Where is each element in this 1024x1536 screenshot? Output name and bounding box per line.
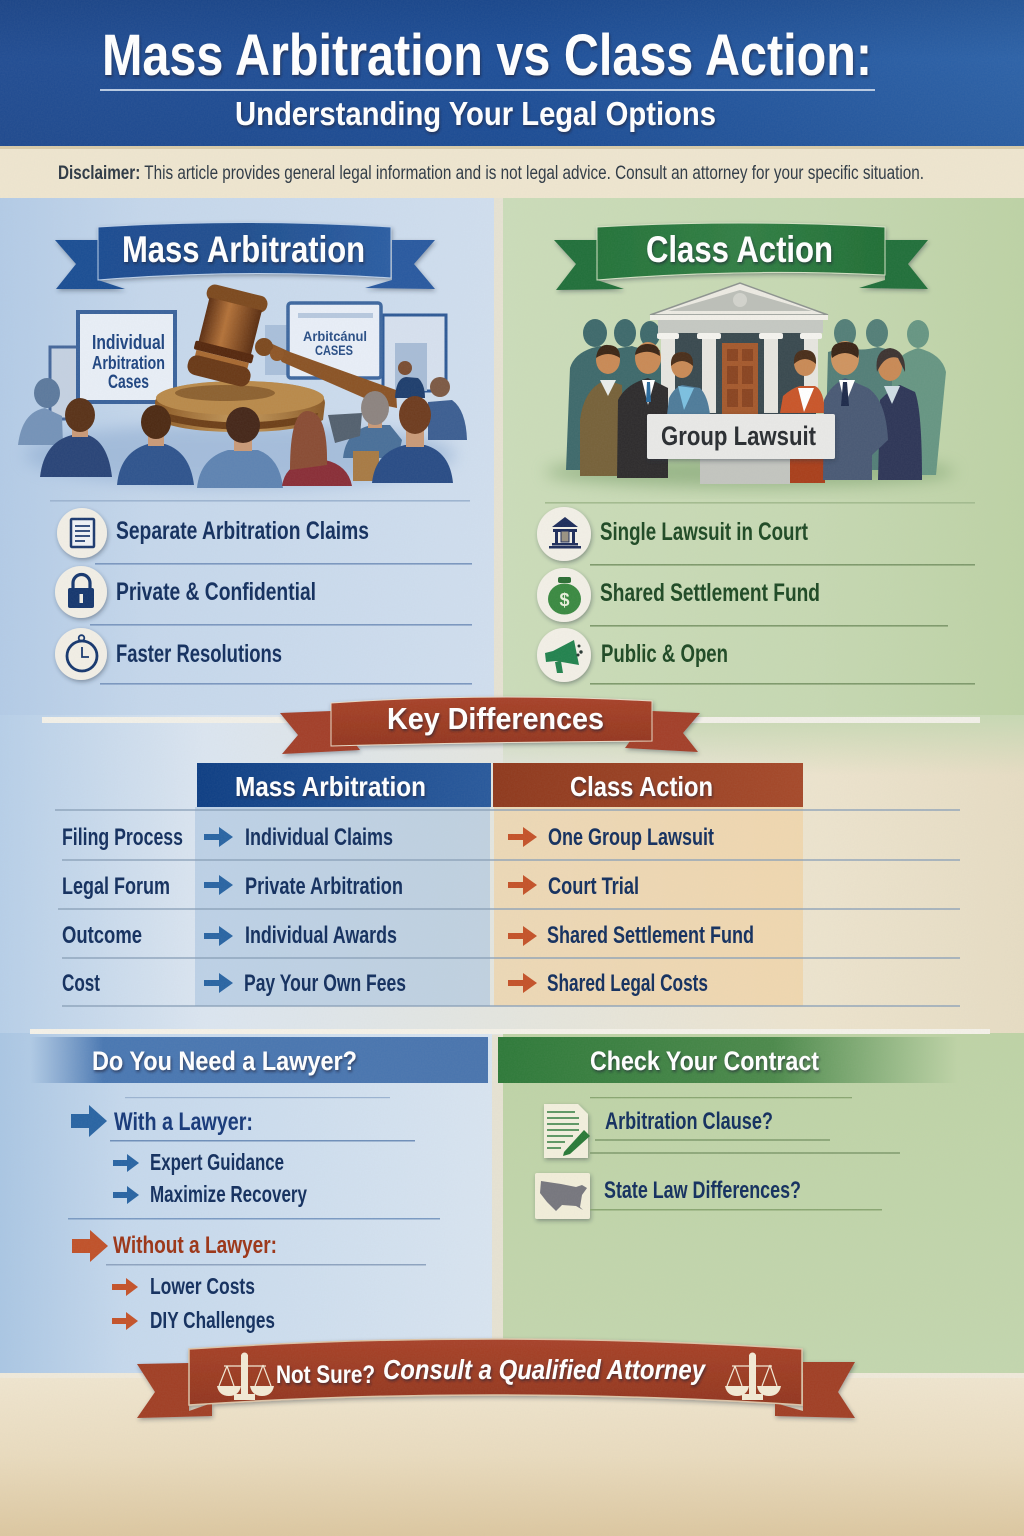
icon: document [57, 508, 107, 558]
heading: do you need a lawyer: Do You Need a Lawyer? [92, 1046, 357, 1076]
row: outcome [62, 922, 754, 949]
row: cost [62, 970, 708, 997]
comparison table [55, 763, 960, 1006]
feature row: single lawsuit: Single Lawsuit in Court [600, 518, 808, 546]
icon: scales left [217, 1353, 274, 1400]
item: state law differences: State Law Differences? [604, 1177, 801, 1204]
ribbon: key differences: Key Differences [387, 701, 604, 736]
courthouse [650, 283, 828, 484]
item: arbitration clause [544, 1104, 773, 1158]
banner text: Not Sure? [276, 1361, 375, 1389]
feature row: settlement [537, 568, 820, 622]
sign: group lawsuit: Group Lawsuit [661, 421, 816, 451]
table header: class action [493, 763, 803, 807]
feature row: public [537, 628, 728, 682]
header band [0, 0, 1024, 146]
row: filing process: Individual Claims [245, 824, 393, 851]
disclaimer band [0, 146, 1024, 198]
without a lawyer: DIY Challenges [150, 1307, 275, 1333]
ribbon: class action [554, 223, 928, 290]
row: legal forum: Legal Forum [62, 873, 170, 900]
panel: do you need a lawyer [30, 1037, 488, 1333]
row: cost: Shared Legal Costs [547, 970, 708, 997]
title: Mass Arbitration vs Class Action: [102, 23, 872, 88]
row: outcome: Shared Settlement Fund [547, 922, 754, 949]
row: outcome: Outcome [62, 922, 142, 949]
row: filing process: Filing Process [62, 824, 183, 851]
gavel [186, 283, 397, 408]
feature row: private [55, 566, 316, 618]
feature row: single lawsuit [537, 507, 808, 561]
screens: Individual [92, 332, 165, 354]
icon: megaphone [537, 628, 591, 682]
ribbon: mass arbitration: Mass Arbitration [122, 229, 365, 270]
panel: check your contract [498, 1037, 958, 1219]
screens [50, 303, 446, 419]
without a lawyer [72, 1230, 426, 1333]
icon: scales right [725, 1353, 781, 1400]
feature row: faster [55, 628, 282, 680]
ribbon: class action: Class Action [646, 229, 833, 270]
icon: padlock [55, 566, 107, 618]
row: filing process [62, 824, 714, 851]
icon: courthouse [537, 507, 591, 561]
with a lawyer [71, 1105, 415, 1207]
row: filing process: One Group Lawsuit [548, 824, 714, 851]
with a lawyer: Expert Guidance [150, 1149, 284, 1175]
table header: class action: Class Action [570, 771, 713, 802]
heading: check your contract: Check Your Contract [590, 1046, 819, 1076]
with a lawyer: With a Lawyer: [114, 1108, 253, 1136]
table header: mass arbitration: Mass Arbitration [235, 771, 426, 802]
panel: mass arbitration [18, 222, 472, 685]
screens: CASES [315, 342, 353, 358]
row: legal forum: Private Arbitration [245, 873, 403, 900]
sound block [155, 381, 325, 432]
icon: money bag [537, 568, 591, 622]
feature row: separate claims: Separate Arbitration Claims [116, 517, 369, 545]
row: outcome: Individual Awards [245, 922, 397, 949]
heading: check your contract [498, 1037, 958, 1083]
row: cost: Pay Your Own Fees [244, 970, 406, 997]
heading: do you need a lawyer [30, 1037, 488, 1083]
ribbon: key differences [280, 697, 700, 754]
screens: Cases [108, 372, 149, 393]
bottom banner: Consult a Qualified Attorney [383, 1354, 706, 1385]
illustration: courthouse and group [545, 283, 955, 487]
seated claimants [18, 361, 467, 488]
group of people [580, 341, 922, 483]
icon: us map [535, 1173, 590, 1219]
icon: contract and pen [544, 1104, 590, 1158]
item: arbitration clause: Arbitration Clause? [605, 1108, 773, 1135]
row: cost: Cost [62, 970, 100, 997]
screens: Arbitration [92, 353, 165, 373]
item: state law differences [535, 1173, 801, 1219]
feature row: public: Public & Open [601, 640, 728, 668]
icon: money bag: $ [560, 590, 570, 610]
bottom banner [137, 1339, 855, 1418]
feature row: separate claims [57, 508, 369, 558]
screens: Arbitcánul [303, 328, 367, 344]
with a lawyer: Maximize Recovery [150, 1181, 307, 1207]
panel: class action [537, 223, 975, 685]
illustration: gavel and claimants [18, 283, 467, 488]
feature row: faster: Faster Resolutions [116, 640, 282, 668]
row: legal forum [62, 873, 639, 900]
row: legal forum: Court Trial [548, 873, 639, 900]
subtitle: Understanding Your Legal Options [235, 95, 716, 132]
without a lawyer: Lower Costs [150, 1273, 255, 1299]
without a lawyer: Without a Lawyer: [113, 1232, 277, 1259]
silhouettes [566, 319, 946, 475]
icon: stopwatch [55, 628, 107, 680]
feature row: settlement: Shared Settlement Fund [600, 579, 820, 607]
table header: mass arbitration [197, 763, 491, 807]
ribbon: mass arbitration [55, 222, 435, 289]
feature row: private: Private & Confidential [116, 578, 316, 606]
sign: group lawsuit [647, 414, 835, 459]
